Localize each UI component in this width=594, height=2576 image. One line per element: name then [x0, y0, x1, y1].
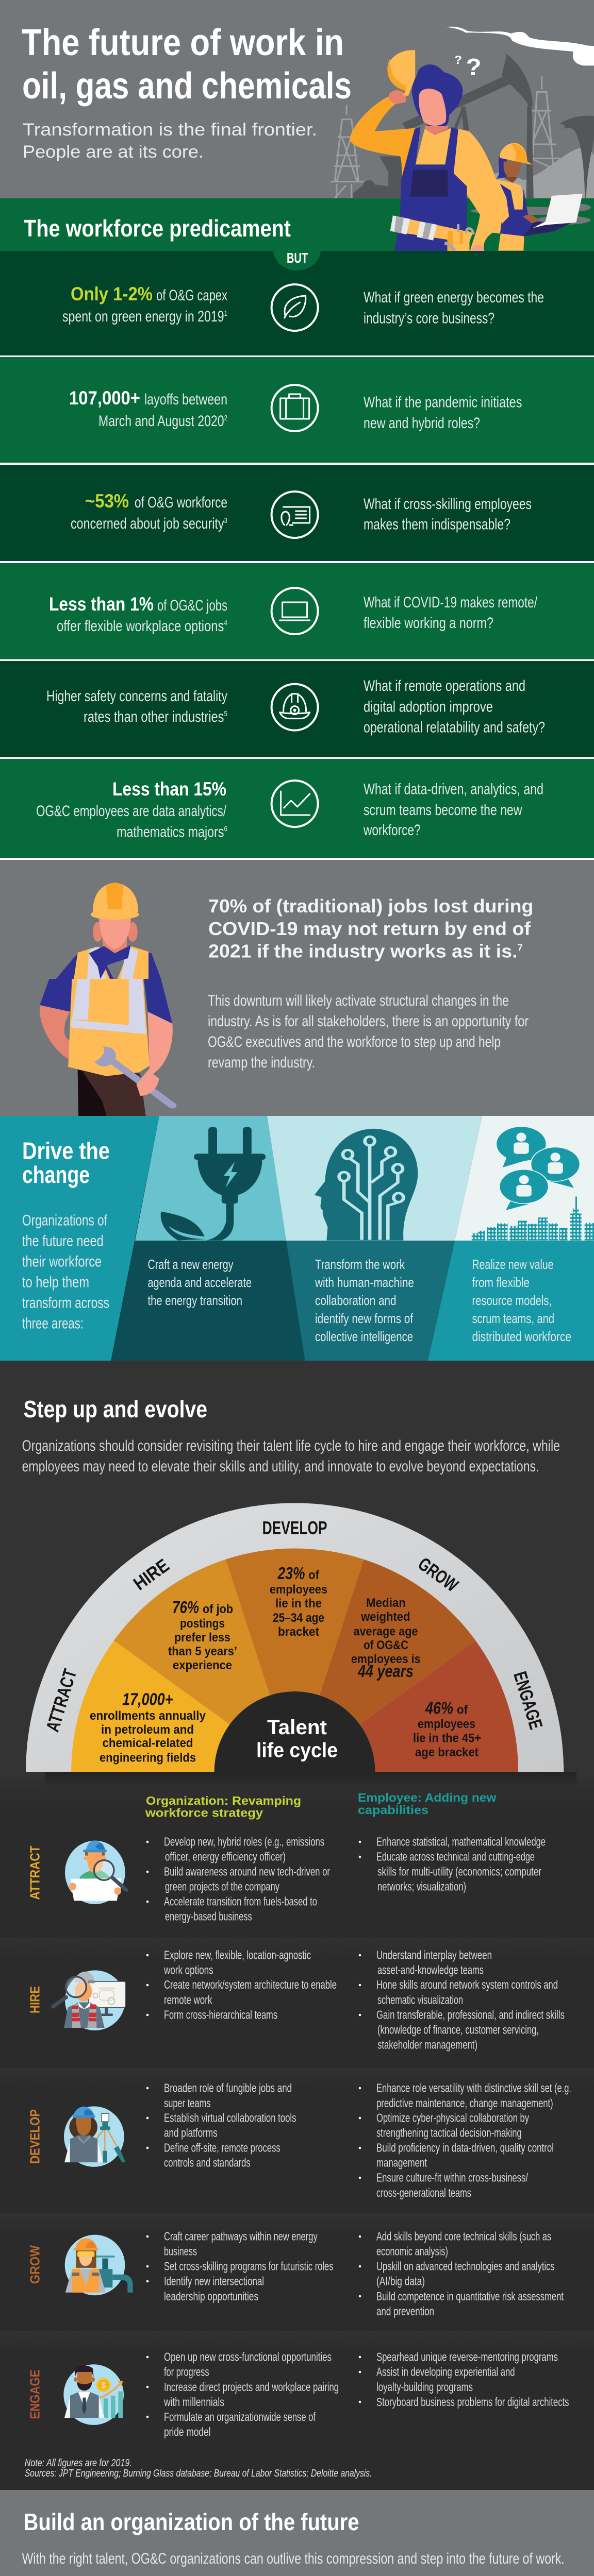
- icon: hard hat: [272, 684, 318, 731]
- upper section shading: [0, 1361, 594, 1778]
- employee bullets: economic analysis): [376, 2245, 448, 2258]
- row 3 statistic: [71, 490, 227, 532]
- icon: briefcase: [272, 385, 318, 431]
- text block: intro: Organizations of: [22, 1212, 108, 1229]
- row 1 statistic: [62, 283, 227, 325]
- grow statistic: [351, 1596, 421, 1681]
- segment: attract: [71, 1640, 229, 1772]
- row 6 statistic: Less than 15%: [112, 778, 226, 800]
- ring label: develop: DEVELOP: [262, 1517, 327, 1538]
- column heading: employee: Employee: Adding new: [358, 1791, 497, 1804]
- heading: drive the change: [22, 1138, 110, 1188]
- title: oil, gas and chemicals: [22, 65, 352, 107]
- text block: new value: distributed workforce: [472, 1329, 571, 1344]
- ring label: hire: HIRE: [129, 1554, 173, 1595]
- section band: the workforce predicament: [0, 198, 594, 251]
- text block: intro: to help them: [22, 1274, 89, 1291]
- text block: human-machine collaboration: Transform the work: [315, 1257, 405, 1272]
- hub label: life cycle: [256, 1739, 338, 1762]
- row label: hire: HIRE: [27, 1986, 43, 2013]
- segment: hire: [114, 1560, 270, 1724]
- text block: human-machine collaboration: collaboration and: [315, 1293, 396, 1308]
- row 3 question: [364, 496, 532, 533]
- divider band 3: [0, 561, 594, 563]
- title: The future of work in: [22, 22, 344, 63]
- row 2 question: new and hybrid roles?: [364, 415, 480, 432]
- text block: energy agenda: the energy transition: [147, 1293, 242, 1308]
- text block: energy agenda: agenda and accelerate: [147, 1275, 252, 1290]
- row 6 background: [0, 759, 594, 858]
- text block: intro: three areas:: [22, 1315, 84, 1332]
- engage statistic: 46%: [425, 1698, 453, 1718]
- row 4 statistic: Less than 1%: [49, 594, 154, 615]
- value panel upper: [455, 1116, 594, 1241]
- row 6 question: workforce?: [363, 822, 421, 839]
- employee bullets: skills for multi-utility (economics; computer: [377, 1865, 541, 1878]
- heading: step up and evolve: Step up and evolve: [24, 1396, 207, 1422]
- section background: build an organization: [0, 2490, 594, 2576]
- develop statistic: lie in the: [275, 1597, 322, 1611]
- icon: dollar sign: $: [101, 2380, 106, 2391]
- employee bullets: cross-generational teams: [376, 2186, 471, 2199]
- row 6 question: scrum teams become the new: [364, 802, 522, 819]
- row label: grow: GROW: [27, 2245, 43, 2284]
- organization bullets: [146, 2081, 296, 2170]
- text block: intro: the future need: [22, 1233, 104, 1250]
- organization bullets: work options: [163, 1963, 213, 1977]
- row 2 question: [364, 394, 522, 432]
- row 4 statistic: 4: [224, 619, 227, 628]
- row 3 question: What if cross-skilling employees: [364, 496, 532, 513]
- text block: new value: [472, 1257, 571, 1344]
- BUT tab: BUT: [287, 250, 308, 266]
- row 6 statistic: [36, 778, 227, 841]
- organization bullets: [146, 2350, 339, 2438]
- text block: human-machine collaboration: identify new forms of: [315, 1311, 414, 1326]
- row 4 statistic: [49, 594, 227, 635]
- row 4 statistic: offer flexible workplace options: [57, 618, 268, 635]
- heading: drive the change: change: [22, 1161, 90, 1188]
- organization bullets: Craft career pathways within new energy: [164, 2230, 318, 2243]
- heading: drive the change: Drive the: [22, 1138, 110, 1164]
- header background: [0, 0, 594, 198]
- grow statistic: average age: [354, 1625, 418, 1638]
- row 5 statistic: 5: [224, 709, 227, 718]
- callout: job-loss statement: COVID-19 may not return by end of: [208, 918, 531, 939]
- row label: develop: DEVELOP: [27, 2109, 43, 2164]
- arch shadow: [45, 1772, 576, 1788]
- row 4 statistic: of OG&C jobs: [157, 597, 227, 614]
- employee bullets: [359, 2230, 564, 2318]
- segment: grow: [320, 1560, 475, 1724]
- employee bullets: strengthening tactical decision-making: [376, 2126, 522, 2139]
- icon: circuit head: [315, 1129, 418, 1241]
- hire statistic: [168, 1598, 237, 1672]
- attract statistic: in petroleum and: [101, 1723, 194, 1737]
- avatar: executive with growth chart: [63, 2364, 124, 2425]
- row 4 question: flexible working a norm?: [364, 615, 493, 632]
- employee bullets: networks; visualization): [377, 1879, 466, 1893]
- organization bullets: business: [164, 2245, 197, 2258]
- organization bullets: Explore new, flexible, location-agnostic: [164, 1948, 311, 1962]
- row 6 statistic: OG&C employees are data analytics/: [36, 803, 226, 820]
- oil puddles: [471, 207, 580, 215]
- divider band 5: [0, 757, 594, 759]
- organization bullets: Formulate an organizationwide sense of: [164, 2410, 316, 2424]
- grow statistic: employees is: [351, 1652, 421, 1666]
- organization bullets: Establish virtual collaboration tools: [164, 2111, 296, 2124]
- right derrick: [528, 76, 560, 177]
- organization bullets: [146, 1948, 337, 2021]
- column heading: organization: Organization: Revamping: [146, 1794, 301, 1807]
- employee bullets: asset-and-knowledge teams: [377, 1963, 484, 1977]
- row 3 background: [0, 465, 594, 561]
- text block: intro: [22, 1212, 109, 1332]
- row 3 statistic: 3: [224, 516, 227, 525]
- organization bullets: with millennials: [163, 2395, 224, 2409]
- text block: intro: their workforce: [22, 1253, 102, 1270]
- panel: drive the change: [0, 1116, 594, 1361]
- organization bullets: Accelerate transition from fuels-based to: [164, 1895, 317, 1908]
- row 3 statistic: of O&G workforce: [135, 494, 227, 511]
- text block: step up intro: [22, 1437, 560, 1475]
- organization bullets: Create network/system architecture to enable: [164, 1978, 337, 1991]
- illustration: worker with wrench: [40, 883, 173, 1117]
- source note: Sources: JPT Engineering; Burning Glass database; Bureau of Labor Statistics; Deloitte analysis.: [25, 2468, 372, 2479]
- divider band 6: [0, 858, 594, 860]
- organization bullets: remote work: [164, 1993, 212, 2006]
- hire statistic: 76%: [172, 1598, 199, 1617]
- organization bullets: for progress: [164, 2365, 209, 2379]
- icon: speech bubbles and skyline: [472, 1127, 594, 1241]
- avatar: engineer with valve: [65, 2235, 133, 2295]
- organization bullets: energy-based business: [165, 1910, 252, 1923]
- employee bullets: loyalty-building programs: [376, 2380, 473, 2394]
- row 1 statistic: of O&G capex: [156, 287, 227, 304]
- ring label: attract: ATTRACT: [42, 1667, 81, 1734]
- organization bullets: Form cross-hierarchical teams: [164, 2008, 277, 2021]
- heading: the workforce predicament: The workforce predicament: [24, 215, 291, 242]
- row 2 statistic: March and August 2020: [98, 413, 262, 430]
- foreground worker: [350, 50, 502, 251]
- pump jack: [353, 54, 534, 198]
- organization bullets: Increase direct projects and workplace pairing: [164, 2380, 339, 2394]
- employee bullets: (AI/big data): [376, 2275, 425, 2288]
- row: grow: [27, 2230, 564, 2318]
- grow statistic: Median: [366, 1596, 406, 1610]
- value panel lower: [428, 1241, 594, 1361]
- row 2 question: What if the pandemic initiates: [364, 394, 522, 411]
- subtitle: [23, 120, 317, 162]
- row 6 statistic: 6: [224, 824, 227, 834]
- row 5 statistic: [46, 688, 227, 725]
- text block: energy agenda: [147, 1257, 252, 1308]
- row 5 question: [364, 677, 545, 736]
- organization bullets: leadership opportunities: [164, 2290, 258, 2303]
- row shading: develop: [0, 2068, 594, 2089]
- intro panel background: [0, 1116, 159, 1361]
- organization bullets: Identify new intersectional: [164, 2275, 264, 2288]
- panel: workforce predicament rows: [0, 250, 594, 860]
- organization bullets: and platforms: [164, 2126, 218, 2139]
- header illustration: oil field and workers: [331, 27, 594, 251]
- organization bullets: controls and standards: [164, 2156, 251, 2170]
- row shading: engage: [0, 2331, 594, 2352]
- subtitle: People are at its core.: [23, 142, 204, 162]
- hill: [494, 148, 594, 198]
- text block: new value: resource models,: [472, 1293, 552, 1308]
- work panel upper: [267, 1116, 482, 1241]
- ring label: grow: GROW: [415, 1553, 462, 1596]
- segment: develop: [226, 1548, 364, 1696]
- attract statistic: [90, 1690, 206, 1765]
- column heading: employee: capabilities: [358, 1803, 428, 1817]
- employee bullets: stakeholder management): [377, 2038, 477, 2052]
- organization bullets: officer, energy efficiency officer): [165, 1850, 286, 1863]
- organization bullets: Broaden role of fungible jobs and: [164, 2081, 292, 2095]
- row 1 statistic: spent on green energy in 2019: [62, 308, 272, 325]
- icon: laptop: [272, 588, 318, 634]
- ring label: engage: ENGAGE: [509, 1669, 547, 1732]
- employee bullets: [359, 1835, 546, 1893]
- text block: new value: Realize new value: [472, 1257, 554, 1272]
- engage statistic: lie in the 45+: [413, 1732, 481, 1745]
- organization bullets: green projects of the company: [165, 1879, 279, 1893]
- callout: job-loss statement: 7: [518, 943, 523, 953]
- text block: energy agenda: Craft a new energy: [147, 1257, 233, 1272]
- organization bullets: Open up new cross-functional opportunities: [164, 2350, 332, 2364]
- row 1 statistic: 1: [224, 309, 227, 318]
- employee bullets: [359, 2081, 571, 2199]
- organization bullets: super teams: [164, 2096, 210, 2110]
- source note: [25, 2458, 372, 2479]
- question marks: ?: [454, 54, 462, 67]
- engage statistic: of: [457, 1703, 468, 1717]
- row: hire: [27, 1948, 565, 2052]
- icon: line chart: [272, 781, 318, 827]
- engage statistic: [413, 1698, 481, 1759]
- row 6 question: [363, 781, 543, 839]
- organization bullets: Define off-site, remote process: [164, 2141, 280, 2155]
- row 6 question: What if data-driven, analytics, and: [364, 781, 543, 798]
- hub: [214, 1691, 375, 1772]
- question marks: [454, 54, 482, 81]
- hire statistic: of job: [203, 1602, 233, 1616]
- organization bullets: [146, 1835, 330, 1923]
- avatar: surveyor with tripod: [64, 2106, 125, 2167]
- row 2 statistic: layoffs between: [144, 391, 227, 408]
- BUT tab: [273, 250, 321, 270]
- develop statistic: employees: [270, 1583, 327, 1597]
- energy panel upper: [135, 1116, 286, 1241]
- segment: engage: [360, 1640, 518, 1772]
- organization bullets: pride model: [164, 2425, 210, 2438]
- employee bullets: schematic visualization: [377, 1993, 463, 2006]
- engage statistic: employees: [418, 1717, 475, 1731]
- organization bullets: Set cross-skilling programs for futuristic roles: [164, 2260, 333, 2273]
- row 1 statistic: Only 1-2%: [71, 283, 153, 304]
- text block: downturn: OG&C executives and the workforce to step up and help: [208, 1033, 501, 1050]
- employee bullets: and prevention: [376, 2304, 434, 2318]
- engage statistic: age bracket: [415, 1745, 478, 1759]
- employee bullets: Ensure culture-fit within cross-business/: [376, 2171, 528, 2184]
- divider band 2: [0, 463, 594, 465]
- text block: downturn: revamp the industry.: [208, 1054, 315, 1071]
- organization bullets: Develop new, hybrid roles (e.g., emissions: [164, 1835, 324, 1849]
- row 1 question: [364, 289, 544, 327]
- worker lower body: [40, 979, 173, 1117]
- attract statistic: chemical-related: [102, 1736, 193, 1750]
- row 4 question: [364, 594, 537, 632]
- row 4 background: [0, 563, 594, 659]
- text block: new value: from flexible: [472, 1275, 530, 1290]
- text block: downturn: [208, 992, 529, 1071]
- avatar: worker with plan and magnifier: [65, 1840, 126, 1904]
- employee bullets: Educate across technical and cutting-edge: [376, 1850, 535, 1863]
- smoke plume: [445, 27, 594, 65]
- row 2 statistic: 107,000+: [69, 387, 140, 409]
- text block: human-machine collaboration: with human-machine: [315, 1275, 414, 1290]
- column heading: organization: workforce strategy: [145, 1806, 263, 1820]
- row 2 statistic: 2: [224, 414, 227, 422]
- row 3 question: makes them indispensable?: [364, 516, 510, 533]
- develop statistic: [270, 1564, 327, 1639]
- employee bullets: Optimize cyber-physical collaboration by: [376, 2111, 529, 2124]
- callout: job-loss statement: 70% of (traditional) jobs lost during: [208, 895, 533, 917]
- hire statistic: prefer less: [174, 1631, 230, 1645]
- background worker with laptop: [493, 143, 583, 251]
- callout: job-loss statement: 2021 if the industry works as it is.: [208, 941, 504, 961]
- row 5 background: [0, 661, 594, 757]
- row 1 question: What if green energy becomes the: [364, 289, 544, 306]
- hire statistic: postings: [180, 1617, 225, 1631]
- row label: attract: ATTRACT: [27, 1845, 43, 1900]
- hire statistic: experience: [173, 1658, 232, 1672]
- employee bullets: management: [376, 2156, 427, 2170]
- develop statistic: of: [308, 1568, 320, 1582]
- grow statistic: weighted: [360, 1610, 410, 1624]
- text block: human-machine collaboration: [315, 1257, 414, 1344]
- callout: job-loss statement: [208, 895, 533, 961]
- source note: Note: All figures are for 2019.: [25, 2458, 132, 2469]
- subtitle: Transformation is the final frontier.: [23, 120, 317, 140]
- grow statistic: of OG&C: [364, 1638, 408, 1652]
- row 5 question: What if remote operations and: [364, 677, 525, 694]
- oil gusher: [560, 116, 594, 198]
- row: attract: [27, 1835, 546, 1923]
- attract statistic: enrollments annually: [90, 1709, 206, 1723]
- row 5 statistic: Higher safety concerns and fatality: [46, 688, 227, 705]
- row 3 statistic: concerned about job security: [71, 515, 269, 532]
- divider band 4: [0, 659, 594, 661]
- text block: human-machine collaboration: collective intelligence: [315, 1329, 413, 1344]
- organization bullets: Build awareness around new tech-driven or: [164, 1865, 330, 1878]
- row 4 question: What if COVID-19 makes remote/: [364, 594, 537, 611]
- icon: plug with leaf: [161, 1127, 266, 1241]
- develop statistic: 23%: [277, 1564, 305, 1583]
- row label: engage: ENGAGE: [27, 2370, 43, 2419]
- transition shading: [0, 1777, 594, 1808]
- heading: build an organization of the future: Build an organization of the future: [24, 2509, 359, 2535]
- text block: intro: transform across: [22, 1295, 109, 1312]
- energy panel lower: [111, 1241, 305, 1361]
- row 1 background: [0, 251, 594, 355]
- employee bullets: Assist in developing experiential and: [376, 2365, 515, 2379]
- employee bullets: [359, 2350, 569, 2409]
- text block: new value: scrum teams, and: [472, 1311, 554, 1326]
- icon: leaf: [272, 284, 318, 331]
- divider band 1: [0, 355, 594, 357]
- outer ring: [26, 1503, 564, 1772]
- work panel lower: [286, 1241, 455, 1361]
- employee bullets: [359, 1948, 565, 2052]
- develop statistic: bracket: [278, 1625, 319, 1639]
- attract statistic: engineering fields: [100, 1751, 196, 1765]
- row shading: hire: [0, 1938, 594, 1959]
- chart: talent life cycle arch: [26, 1503, 576, 1788]
- develop statistic: 25–34 age: [273, 1611, 324, 1625]
- column heading: employee: [358, 1791, 497, 1817]
- row 3 statistic: ~53%: [85, 490, 129, 512]
- row 5 question: digital adoption improve: [364, 699, 493, 715]
- row 6 statistic: mathematics majors: [117, 823, 255, 841]
- row 5 question: operational relatability and safety?: [364, 719, 545, 736]
- hub label: [256, 1716, 338, 1762]
- worker upper body: [56, 883, 161, 979]
- title: [22, 22, 352, 107]
- grow statistic: 44 years: [357, 1662, 414, 1681]
- organization bullets: [146, 2230, 333, 2303]
- avatar: engineer with monitor: [53, 1970, 125, 2030]
- row 5 statistic: rates than other industries: [84, 708, 262, 725]
- question marks: ?: [466, 54, 482, 81]
- hub label: Talent: [267, 1716, 327, 1739]
- section background: step up and evolve: [0, 1361, 594, 2490]
- panel: job-loss callout background: [0, 860, 594, 1116]
- row 2 statistic: [69, 387, 227, 430]
- icon: certificate: [272, 492, 318, 538]
- row shading: grow: [0, 2213, 594, 2234]
- row: develop: [27, 2081, 571, 2199]
- row: engage: [27, 2350, 569, 2438]
- column heading: organization: [145, 1794, 301, 1820]
- text block: downturn: This downturn will likely activate structural changes in the: [208, 992, 509, 1009]
- left derrick: [331, 105, 364, 198]
- hire statistic: than 5 years’: [168, 1645, 237, 1658]
- employee bullets: Understand interplay between: [376, 1948, 492, 1962]
- row 1 question: industry’s core business?: [364, 310, 494, 327]
- attract statistic: 17,000+: [122, 1690, 173, 1709]
- row 2 background: [0, 357, 594, 463]
